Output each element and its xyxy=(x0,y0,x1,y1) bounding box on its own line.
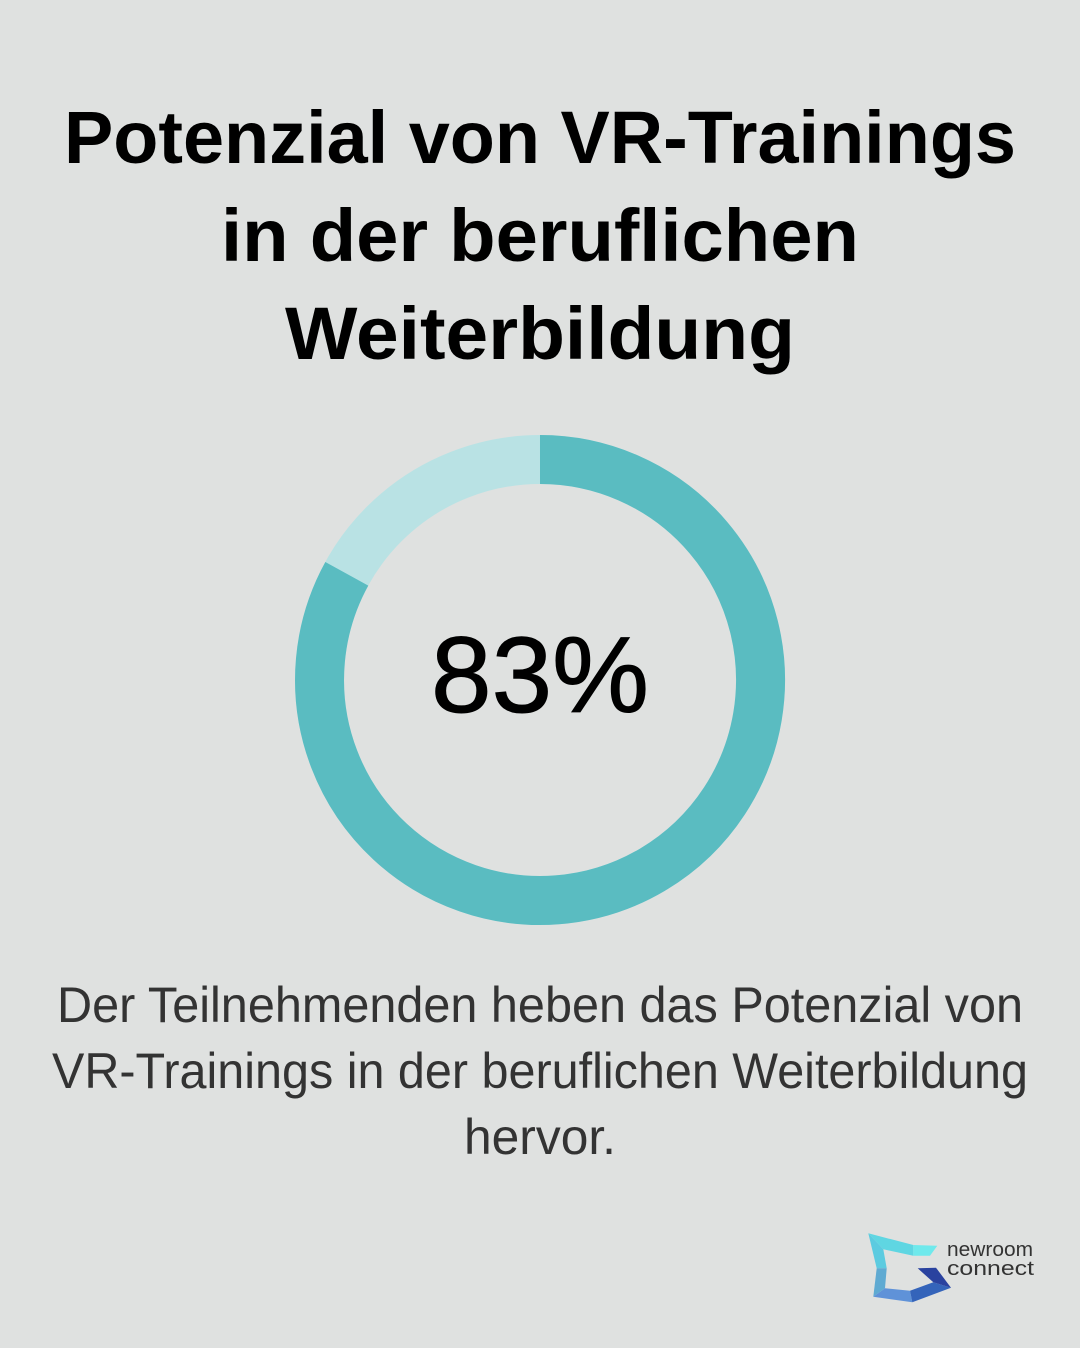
logo wordmark: connect xyxy=(947,1258,1035,1280)
donut chart: 83% xyxy=(320,460,761,901)
logo: newroom connect xyxy=(868,1233,1035,1302)
description text xyxy=(52,977,1028,1165)
title: Weiterbildung xyxy=(285,292,795,375)
title: in der beruflichen xyxy=(221,194,859,277)
title: Potenzial von VR-Trainings xyxy=(64,96,1016,179)
title xyxy=(64,96,1016,375)
description text: Der Teilnehmenden heben das Potenzial von xyxy=(57,977,1023,1033)
description text: hervor. xyxy=(464,1109,616,1165)
description text: VR-Trainings in der beruflichen Weiterbildung xyxy=(52,1043,1028,1099)
percentage value: 83% xyxy=(431,614,649,735)
logo wordmark xyxy=(947,1239,1035,1280)
logo wordmark: newroom xyxy=(947,1239,1033,1261)
icon: logo mark xyxy=(868,1233,951,1302)
